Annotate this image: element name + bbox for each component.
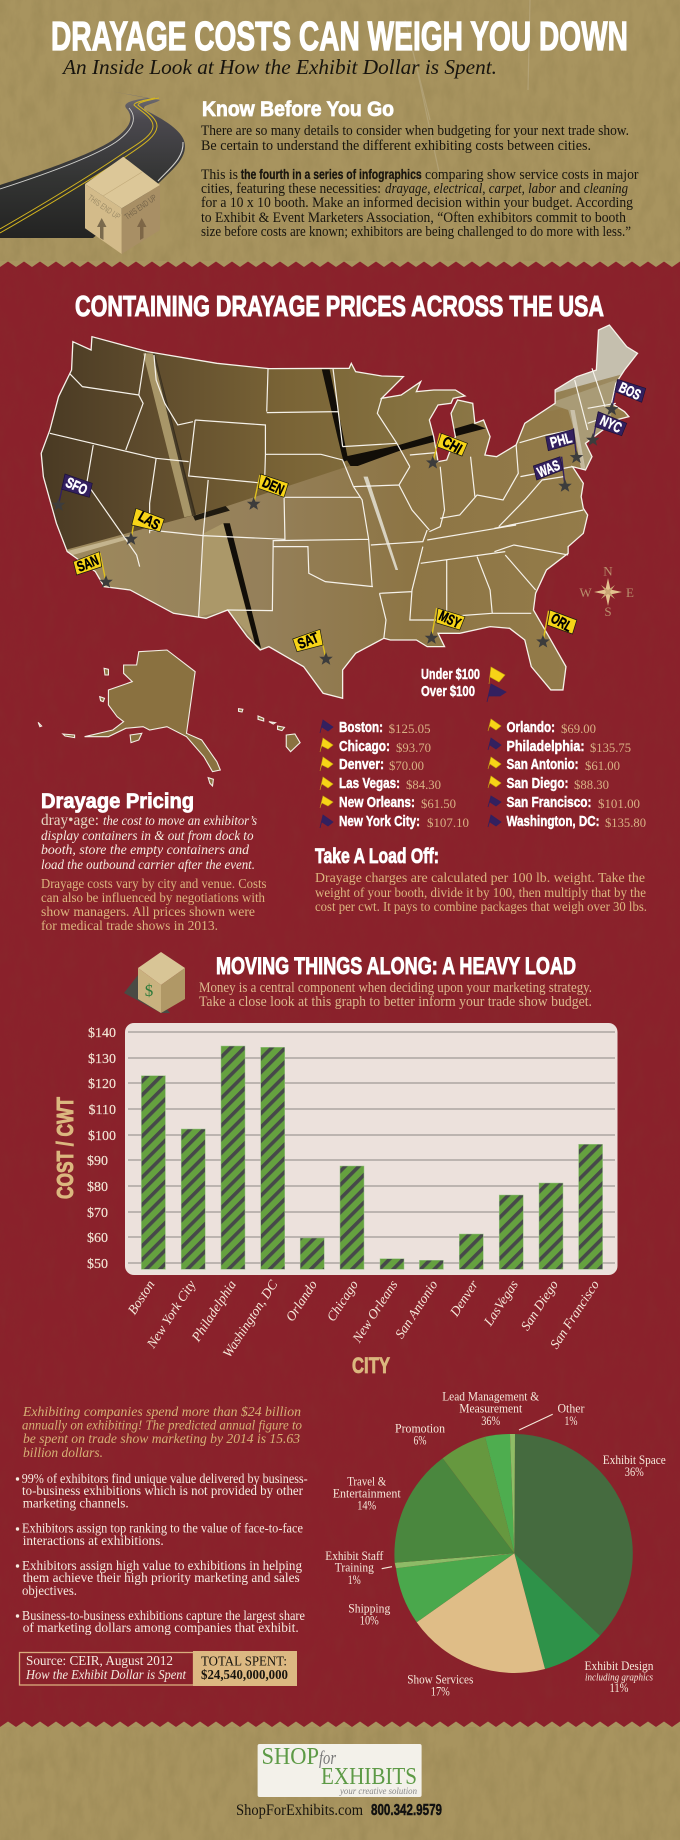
pie labels: Shipping xyxy=(348,1601,391,1616)
price list: San Francisco: xyxy=(506,795,592,811)
text block: intro: size before costs are known; exhibitors are being challenged to do more with less.” xyxy=(201,224,631,240)
subtitle: An Inside Look at How the Exhibit Dollar is Spent. xyxy=(61,55,497,79)
pie labels: Promotion xyxy=(395,1420,445,1435)
pie labels xyxy=(325,1389,666,1698)
pie labels: 10% xyxy=(360,1612,379,1627)
icon: road with box: THIS END UP xyxy=(86,192,123,222)
legend: flag colours: Under $100 xyxy=(421,667,480,683)
flag: ORL: ORL xyxy=(548,611,575,636)
panel: exhibit spending facts xyxy=(16,1405,308,1686)
pie labels: 17% xyxy=(431,1683,450,1698)
text block: spending intro: Exhibiting companies spend more than $24 billion xyxy=(22,1405,301,1420)
text block: intro: comparing show service costs in major xyxy=(425,167,639,183)
icon: compass: E xyxy=(626,585,634,600)
icon: road with box: THIS END UP xyxy=(122,192,159,222)
price list: $135.75 xyxy=(590,740,631,755)
text block: definition: dray•age: xyxy=(41,812,99,829)
price list: $61.50 xyxy=(421,796,456,811)
logo: shop for exhibits: your creative solution xyxy=(339,1786,417,1796)
price list: $93.70 xyxy=(396,740,431,755)
flag: DEN: DEN xyxy=(260,475,286,499)
price list: San Antonio: xyxy=(506,757,578,773)
x axis labels: San Diego xyxy=(518,1277,561,1333)
y axis labels xyxy=(87,1026,116,1272)
flag: SFO xyxy=(52,474,92,511)
pie chart: exhibit dollar xyxy=(325,1389,666,1698)
flag: LAS: LAS xyxy=(135,509,163,534)
text block: intro: the fourth in a series of infographics xyxy=(241,167,422,183)
callout: total spent: $24,540,000,000 xyxy=(201,1667,288,1682)
text block: intro: cities, featuring these necessities: xyxy=(201,181,381,197)
bullet list: them achieve their high priority marketing and sales xyxy=(23,1570,300,1585)
text block: intro xyxy=(201,123,639,240)
text block: weight calculation: weight of your booth, divide it by 100, then multiply that by the xyxy=(315,886,646,901)
x axis labels: New York City xyxy=(143,1277,199,1351)
text block: graph intro: Money is a central component when deciding upon your marketing strategy. xyxy=(199,980,592,996)
x axis labels: San Antonio xyxy=(392,1277,441,1341)
price list: Chicago: xyxy=(339,739,390,755)
text block: spending intro: be spent on trade show marketing by 2014 is 15.63 xyxy=(23,1432,300,1447)
bullet list: marketing channels. xyxy=(23,1496,129,1511)
text block: intro: drayage, electrical, carpet, labor xyxy=(385,181,556,197)
text block: weight calculation: Drayage charges are calculated per 100 lb. weight. Take the xyxy=(315,871,645,886)
pie labels: 36% xyxy=(481,1413,500,1428)
icon: compass: N xyxy=(603,564,613,578)
flag: CHI xyxy=(426,433,468,468)
x axis labels: Philadelphia xyxy=(188,1277,239,1345)
price list xyxy=(339,720,646,830)
price list: $84.30 xyxy=(406,777,441,792)
price list: $125.05 xyxy=(389,721,431,736)
legend: flag colours: Over $100 xyxy=(421,684,475,700)
x axis labels: Chicago xyxy=(324,1277,361,1324)
flag icons: left column xyxy=(320,720,333,828)
heading: drayage pricing: Drayage Pricing xyxy=(41,789,194,813)
leader lines xyxy=(382,1414,553,1569)
flag: SFO: SFO xyxy=(63,475,90,499)
pie labels: Training xyxy=(335,1560,374,1575)
text block: spending intro: billion dollars. xyxy=(23,1446,103,1461)
price list: $107.10 xyxy=(427,815,469,830)
flag: NYC xyxy=(586,412,627,446)
logo: shop for exhibits: for xyxy=(319,1748,336,1769)
x axis labels: Washington, DC xyxy=(220,1277,281,1360)
map: Alaska and Hawaii xyxy=(38,650,300,786)
website: ShopForExhibits.com xyxy=(236,1802,363,1819)
callout: total spent: TOTAL SPENT: xyxy=(201,1654,287,1668)
pie labels: Exhibit Design xyxy=(584,1658,654,1673)
text block: definition: display containers in & out from dock to xyxy=(41,829,254,844)
x axis labels: LasVegas xyxy=(480,1277,521,1329)
price list: Washington, DC: xyxy=(506,814,600,830)
pie labels: Show Services xyxy=(407,1671,473,1686)
flag: SAT: SAT xyxy=(296,630,321,653)
flag: NYC: NYC xyxy=(597,413,624,437)
price list: Orlando: xyxy=(506,720,555,736)
x axis labels: Boston xyxy=(125,1277,158,1317)
bullet list: to-business exhibitions which is not provided by other xyxy=(22,1483,303,1498)
pie labels: 6% xyxy=(414,1432,427,1447)
text block: graph intro: Take a close look at this graph to better inform your trade show budget. xyxy=(199,994,592,1010)
bullet list: Exhibitors assign high value to exhibitions in helping xyxy=(22,1558,302,1573)
heading: take a load off: Take A Load Off: xyxy=(315,845,439,868)
text block: intro: for a 10 x 10 booth. Make an informed decision within your budget. According xyxy=(201,195,633,211)
flag: SAN xyxy=(73,552,113,588)
flag: WAS: WAS xyxy=(535,458,563,481)
flag: CHI: CHI xyxy=(439,434,464,458)
bullet list: Business-to-business exhibitions capture the largest share xyxy=(22,1608,305,1623)
flag: ORL xyxy=(536,610,577,648)
price list: $135.80 xyxy=(605,815,646,830)
y axis title: COST / CWT xyxy=(52,1097,78,1199)
price list: $69.00 xyxy=(561,721,596,736)
text block: intro: cleaning xyxy=(584,181,628,197)
price list: Denver: xyxy=(339,757,384,773)
pie labels: including graphics xyxy=(585,1672,653,1684)
logo: shop for exhibits xyxy=(258,1744,422,1797)
bullet list xyxy=(16,1471,308,1635)
text block: intro: There are so many details to consider when budgeting for your next trade show. xyxy=(201,123,629,139)
panel: footer xyxy=(236,1744,442,1819)
pie labels: Exhibit Staff xyxy=(325,1548,384,1563)
y axis labels: $90 xyxy=(87,1154,108,1169)
price list: $61.00 xyxy=(585,758,620,773)
y axis labels: $130 xyxy=(88,1052,116,1067)
price list: $70.00 xyxy=(389,758,424,773)
flag icons: right column xyxy=(488,719,501,827)
price list: New York City: xyxy=(339,814,420,830)
price list: San Diego: xyxy=(506,776,568,792)
icon: compass xyxy=(579,564,634,619)
map: contiguous USA xyxy=(40,324,638,700)
callout: source: How the Exhibit Dollar is Spent xyxy=(25,1667,187,1682)
phone: 800.342.9579 xyxy=(371,1802,442,1819)
text block: definition: booth, store the empty containers and xyxy=(41,843,250,858)
icon: compass: W xyxy=(579,585,592,600)
text block: definition xyxy=(41,812,257,873)
y axis labels: $100 xyxy=(88,1129,116,1144)
flag: PHL xyxy=(546,428,583,463)
price list: Boston: xyxy=(339,720,383,736)
bar chart: cost per cwt by city xyxy=(52,1023,618,1378)
icon: dollar box: $ xyxy=(145,981,153,1000)
text block: spending intro xyxy=(22,1405,302,1461)
background: red band xyxy=(0,267,680,1727)
icon: dollar box xyxy=(124,952,185,1013)
flag: MSY: MSY xyxy=(436,608,463,632)
y axis labels: $110 xyxy=(89,1103,116,1118)
icon: road with box xyxy=(0,91,185,254)
y axis labels: $50 xyxy=(87,1257,108,1272)
bullet list: 99% of exhibitors find unique value delivered by business- xyxy=(22,1471,308,1486)
price list: $101.00 xyxy=(598,796,640,811)
pie labels: Exhibit Space xyxy=(603,1452,666,1467)
text block: definition: the cost to move an exhibitor’s xyxy=(103,814,257,829)
text block: graph intro xyxy=(199,980,592,1010)
text block: costs vary xyxy=(41,877,266,934)
text block: definition: load the outbound carrier after the event. xyxy=(41,858,255,873)
x axis title: CITY xyxy=(352,1353,390,1378)
flag: DEN xyxy=(247,474,288,510)
pie labels: 1% xyxy=(564,1413,578,1428)
text block: intro: Be certain to understand the different exhibiting costs between cities. xyxy=(201,138,591,154)
pie labels: Measurement xyxy=(459,1400,523,1416)
y axis labels: $70 xyxy=(87,1206,108,1221)
text block: costs vary: Drayage costs vary by city and venue. Costs xyxy=(41,877,266,892)
text block: intro: This is xyxy=(201,167,238,183)
callout: total spent xyxy=(193,1651,297,1686)
panel: take a load off xyxy=(315,845,647,915)
text block: spending intro: annually on exhibiting! The predicted annual figure to xyxy=(22,1418,302,1434)
price list: New Orleans: xyxy=(339,795,415,811)
text block: weight calculation: cost per cwt. It pays to combine packages that weigh over 30 lbs. xyxy=(315,900,647,915)
pie labels: Entertainment xyxy=(333,1485,401,1500)
flag: WAS xyxy=(533,457,572,492)
pie labels: Other xyxy=(558,1400,585,1416)
price list: Las Vegas: xyxy=(339,776,400,792)
flag: LAS xyxy=(124,508,164,545)
y axis labels: $120 xyxy=(88,1077,116,1092)
chart panel xyxy=(125,1023,618,1275)
pie labels: 14% xyxy=(357,1497,376,1512)
y axis labels: $60 xyxy=(87,1231,108,1246)
pie labels: Lead Management & xyxy=(442,1389,539,1404)
flag: PHL: PHL xyxy=(549,430,574,452)
x axis labels: Denver xyxy=(446,1277,481,1320)
pie labels: 1% xyxy=(348,1572,361,1587)
bullet list: objectives. xyxy=(22,1583,77,1598)
logo: shop for exhibits: EXHIBITS xyxy=(321,1764,417,1790)
text block: weight calculation xyxy=(315,871,647,915)
pie labels: 11% xyxy=(610,1680,629,1695)
panel: drayage pricing xyxy=(41,789,266,934)
panel: header xyxy=(0,13,639,254)
x axis labels xyxy=(125,1277,602,1360)
x axis labels: New Orleans xyxy=(349,1277,401,1346)
callout: source xyxy=(20,1652,194,1685)
price list: $88.30 xyxy=(574,777,609,792)
panel: city prices xyxy=(320,719,646,830)
x axis labels: San Francisco xyxy=(547,1277,602,1351)
callout: source: Source: CEIR, August 2012 xyxy=(26,1653,173,1668)
y axis labels: $140 xyxy=(88,1026,116,1041)
flag: SAN: SAN xyxy=(75,553,101,576)
x axis labels: Orlando xyxy=(283,1277,320,1324)
text block: intro: to Exhibit & Event Marketers Association, “Often exhibitors commit to booth xyxy=(201,210,626,226)
flag: SAT xyxy=(293,629,333,665)
bars xyxy=(141,1046,603,1269)
logo: shop for exhibits: SHOP xyxy=(262,1744,319,1770)
text block: intro: and xyxy=(559,181,580,197)
text block: costs vary: show managers. All prices shown were xyxy=(41,905,255,920)
bullet list: Exhibitors assign top ranking to the value of face-to-face xyxy=(22,1521,303,1536)
flag: BOS xyxy=(605,379,646,415)
flag: MSY xyxy=(425,608,465,644)
y axis labels: $80 xyxy=(87,1180,108,1195)
flag: BOS: BOS xyxy=(616,380,643,404)
pie labels: Travel & xyxy=(347,1474,386,1489)
heading: know before you go: Know Before You Go xyxy=(202,97,394,121)
text block: costs vary: for medical trade shows in 2013. xyxy=(41,919,218,934)
bullet list: interactions at exhibitions. xyxy=(23,1533,164,1548)
slices xyxy=(394,1434,633,1673)
text block: costs vary: can also be influenced by negotiations with xyxy=(41,891,265,906)
pie labels: 36% xyxy=(625,1464,644,1479)
price list: Philadelphia: xyxy=(506,739,584,755)
bullet list: of marketing dollars among companies that exhibit. xyxy=(23,1620,299,1635)
legend: flag colours xyxy=(421,667,506,702)
icon: compass: S xyxy=(604,604,612,619)
